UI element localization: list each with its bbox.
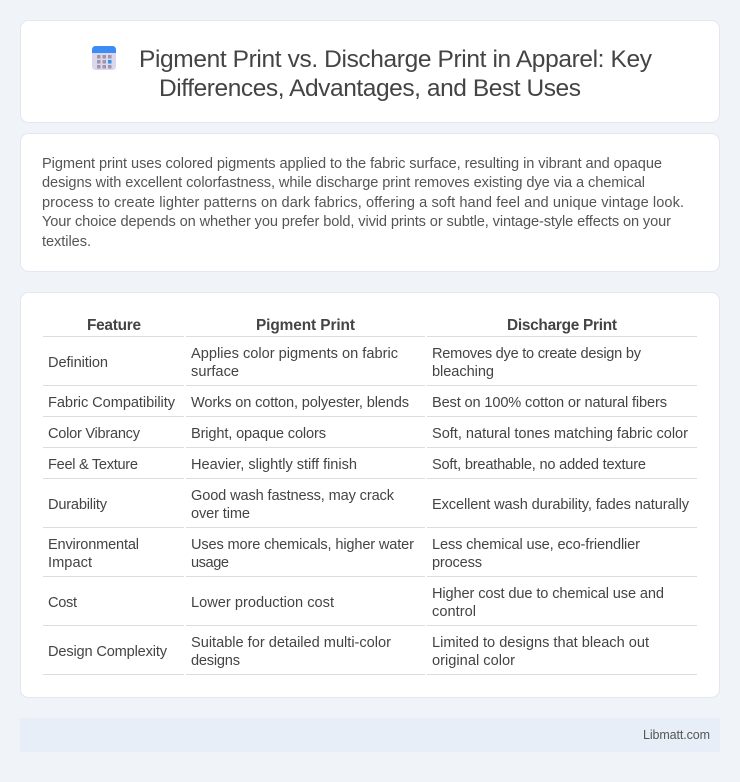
footer bar: Libmatt.com — [643, 728, 710, 742]
row: fabric compatibility: Works on cotton, polyester, blends — [191, 395, 409, 411]
row: definition: Removes dye to create design by — [432, 346, 642, 362]
heading: title: Pigment Print vs. Discharge Print in Apparel: Key — [139, 46, 653, 73]
row: durability: Good wash fastness, may crack — [191, 488, 395, 504]
table header row: Pigment Print — [256, 317, 355, 334]
row: color vibrancy: Bright, opaque colors — [191, 426, 326, 442]
row: environmental impact: Environmental — [48, 537, 139, 553]
row: durability: over time — [191, 506, 250, 522]
row: durability: Excellent wash durability, fades naturally — [432, 497, 690, 513]
row: cost: Lower production cost — [191, 595, 334, 611]
panel: comparison table — [20, 292, 720, 698]
row: color vibrancy: Soft, natural tones matching fabric color — [432, 426, 688, 442]
row: design complexity: designs — [191, 653, 240, 669]
table header row: Discharge Print — [507, 317, 617, 334]
row: definition: surface — [191, 364, 239, 380]
row: definition: bleaching — [432, 364, 494, 380]
table header row — [87, 317, 617, 334]
text block: summary paragraph: textiles. — [42, 234, 91, 250]
row: cost: Cost — [48, 595, 77, 611]
row: environmental impact: Less chemical use, eco-friendlier — [432, 537, 640, 553]
text block: summary paragraph: Your choice depends on whether you prefer bold, vivid prints or subtle, vintage-style effects on your — [42, 214, 671, 230]
row: design complexity: original color — [432, 653, 515, 669]
row: design complexity: Suitable for detailed multi-color — [191, 635, 391, 651]
row: durability — [48, 488, 690, 522]
text block: summary paragraph: Pigment print uses colored pigments applied to the fabric surface, resulting in vibrant and opaque — [42, 156, 662, 172]
text block: summary paragraph: designs with excellent colorfastness, while discharge print removes existing dye via a chemical — [42, 175, 645, 191]
row: design complexity: Limited to designs that bleach out — [432, 635, 649, 651]
row: definition: Definition — [48, 355, 108, 371]
row: environmental impact: process — [432, 555, 482, 571]
row: feel and texture: Heavier, slightly stiff finish — [191, 457, 357, 473]
row: color vibrancy — [48, 426, 688, 442]
text block: summary paragraph: process to create lighter patterns on dark fabrics, offering a soft hand feel and unique vintage look. — [42, 195, 684, 211]
row: definition: Applies color pigments on fabric — [191, 346, 398, 362]
row: fabric compatibility — [48, 395, 667, 411]
row: fabric compatibility: Best on 100% cotton or natural fibers — [432, 395, 667, 411]
row: feel and texture — [48, 457, 646, 473]
table header row: Feature — [87, 317, 141, 334]
panel: title header — [20, 20, 720, 122]
row: design complexity — [48, 635, 649, 669]
row: definition — [48, 346, 642, 380]
row: cost: Higher cost due to chemical use and — [432, 586, 664, 602]
row: color vibrancy: Color Vibrancy — [48, 426, 141, 442]
row: design complexity: Design Complexity — [48, 644, 168, 660]
heading: title — [139, 46, 653, 102]
row: environmental impact: usage — [191, 555, 229, 571]
row: environmental impact: Uses more chemicals, higher water — [191, 537, 414, 553]
text block: summary paragraph — [42, 156, 684, 250]
heading: title: Differences, Advantages, and Best Uses — [159, 75, 581, 102]
icon: calendar grid — [92, 46, 116, 70]
row: durability: Durability — [48, 497, 108, 513]
panel: introduction — [20, 134, 720, 272]
row: environmental impact: Impact — [48, 555, 92, 571]
row: fabric compatibility: Fabric Compatibility — [48, 395, 176, 411]
row: feel and texture: Feel & Texture — [48, 457, 138, 473]
row: environmental impact — [48, 537, 640, 571]
row: cost — [48, 586, 664, 620]
footer bar — [20, 718, 720, 752]
row: cost: control — [432, 604, 476, 620]
row: feel and texture: Soft, breathable, no added texture — [432, 457, 646, 473]
